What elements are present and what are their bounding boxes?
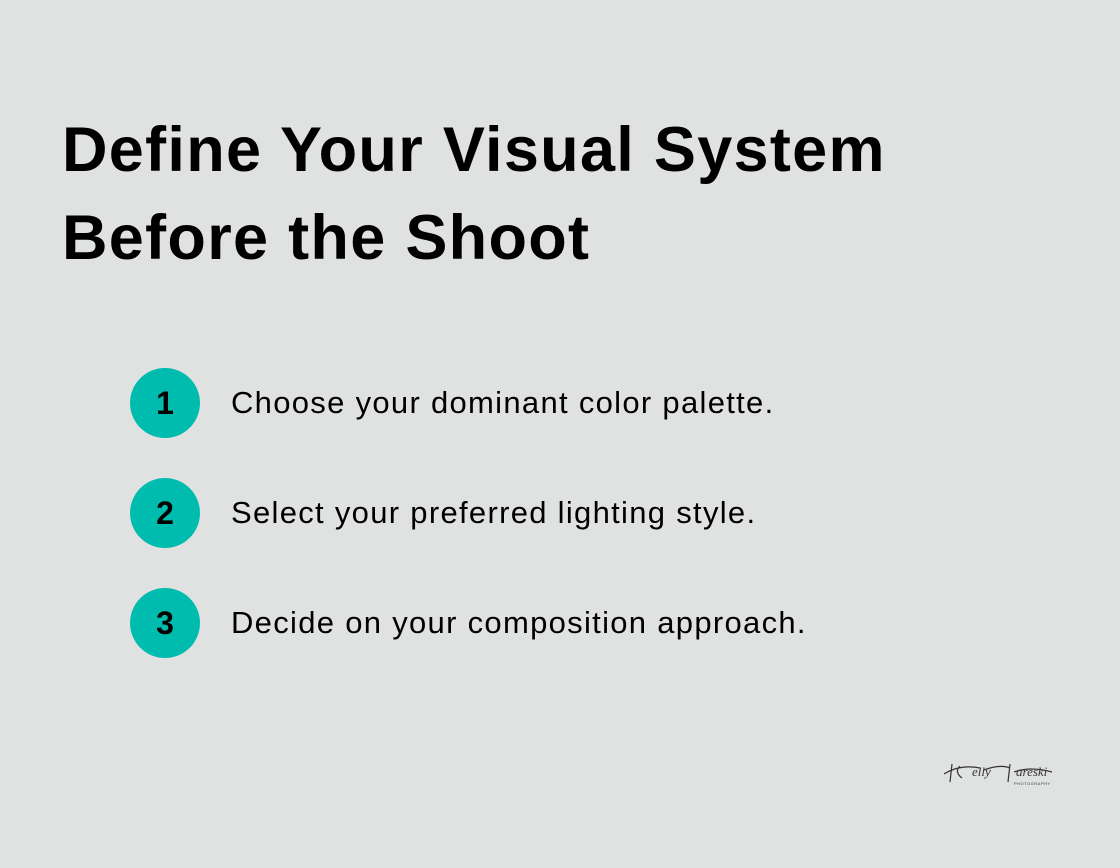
badge 2 bbox=[130, 478, 200, 548]
badge 3 bbox=[130, 588, 200, 658]
title bbox=[62, 115, 886, 273]
text 3: Decide on your composition approach. bbox=[231, 605, 807, 640]
badge 1: 1 bbox=[156, 385, 174, 421]
logo signature bbox=[944, 764, 1052, 786]
logo signature: elly bbox=[972, 764, 991, 779]
text 2: Select your preferred lighting style. bbox=[231, 495, 756, 530]
title: Before the Shoot bbox=[62, 203, 590, 273]
badge 1 bbox=[130, 368, 200, 438]
text 1: Choose your dominant color palette. bbox=[231, 385, 775, 420]
badge 2: 2 bbox=[156, 495, 174, 531]
title: Define Your Visual System bbox=[62, 115, 886, 185]
logo signature: areski bbox=[1016, 764, 1048, 779]
item 2 bbox=[130, 478, 756, 548]
item 1 bbox=[130, 368, 775, 438]
item 3 bbox=[130, 588, 807, 658]
badge 3: 3 bbox=[156, 605, 174, 641]
logo signature: PHOTOGRAPHY bbox=[1014, 781, 1051, 786]
